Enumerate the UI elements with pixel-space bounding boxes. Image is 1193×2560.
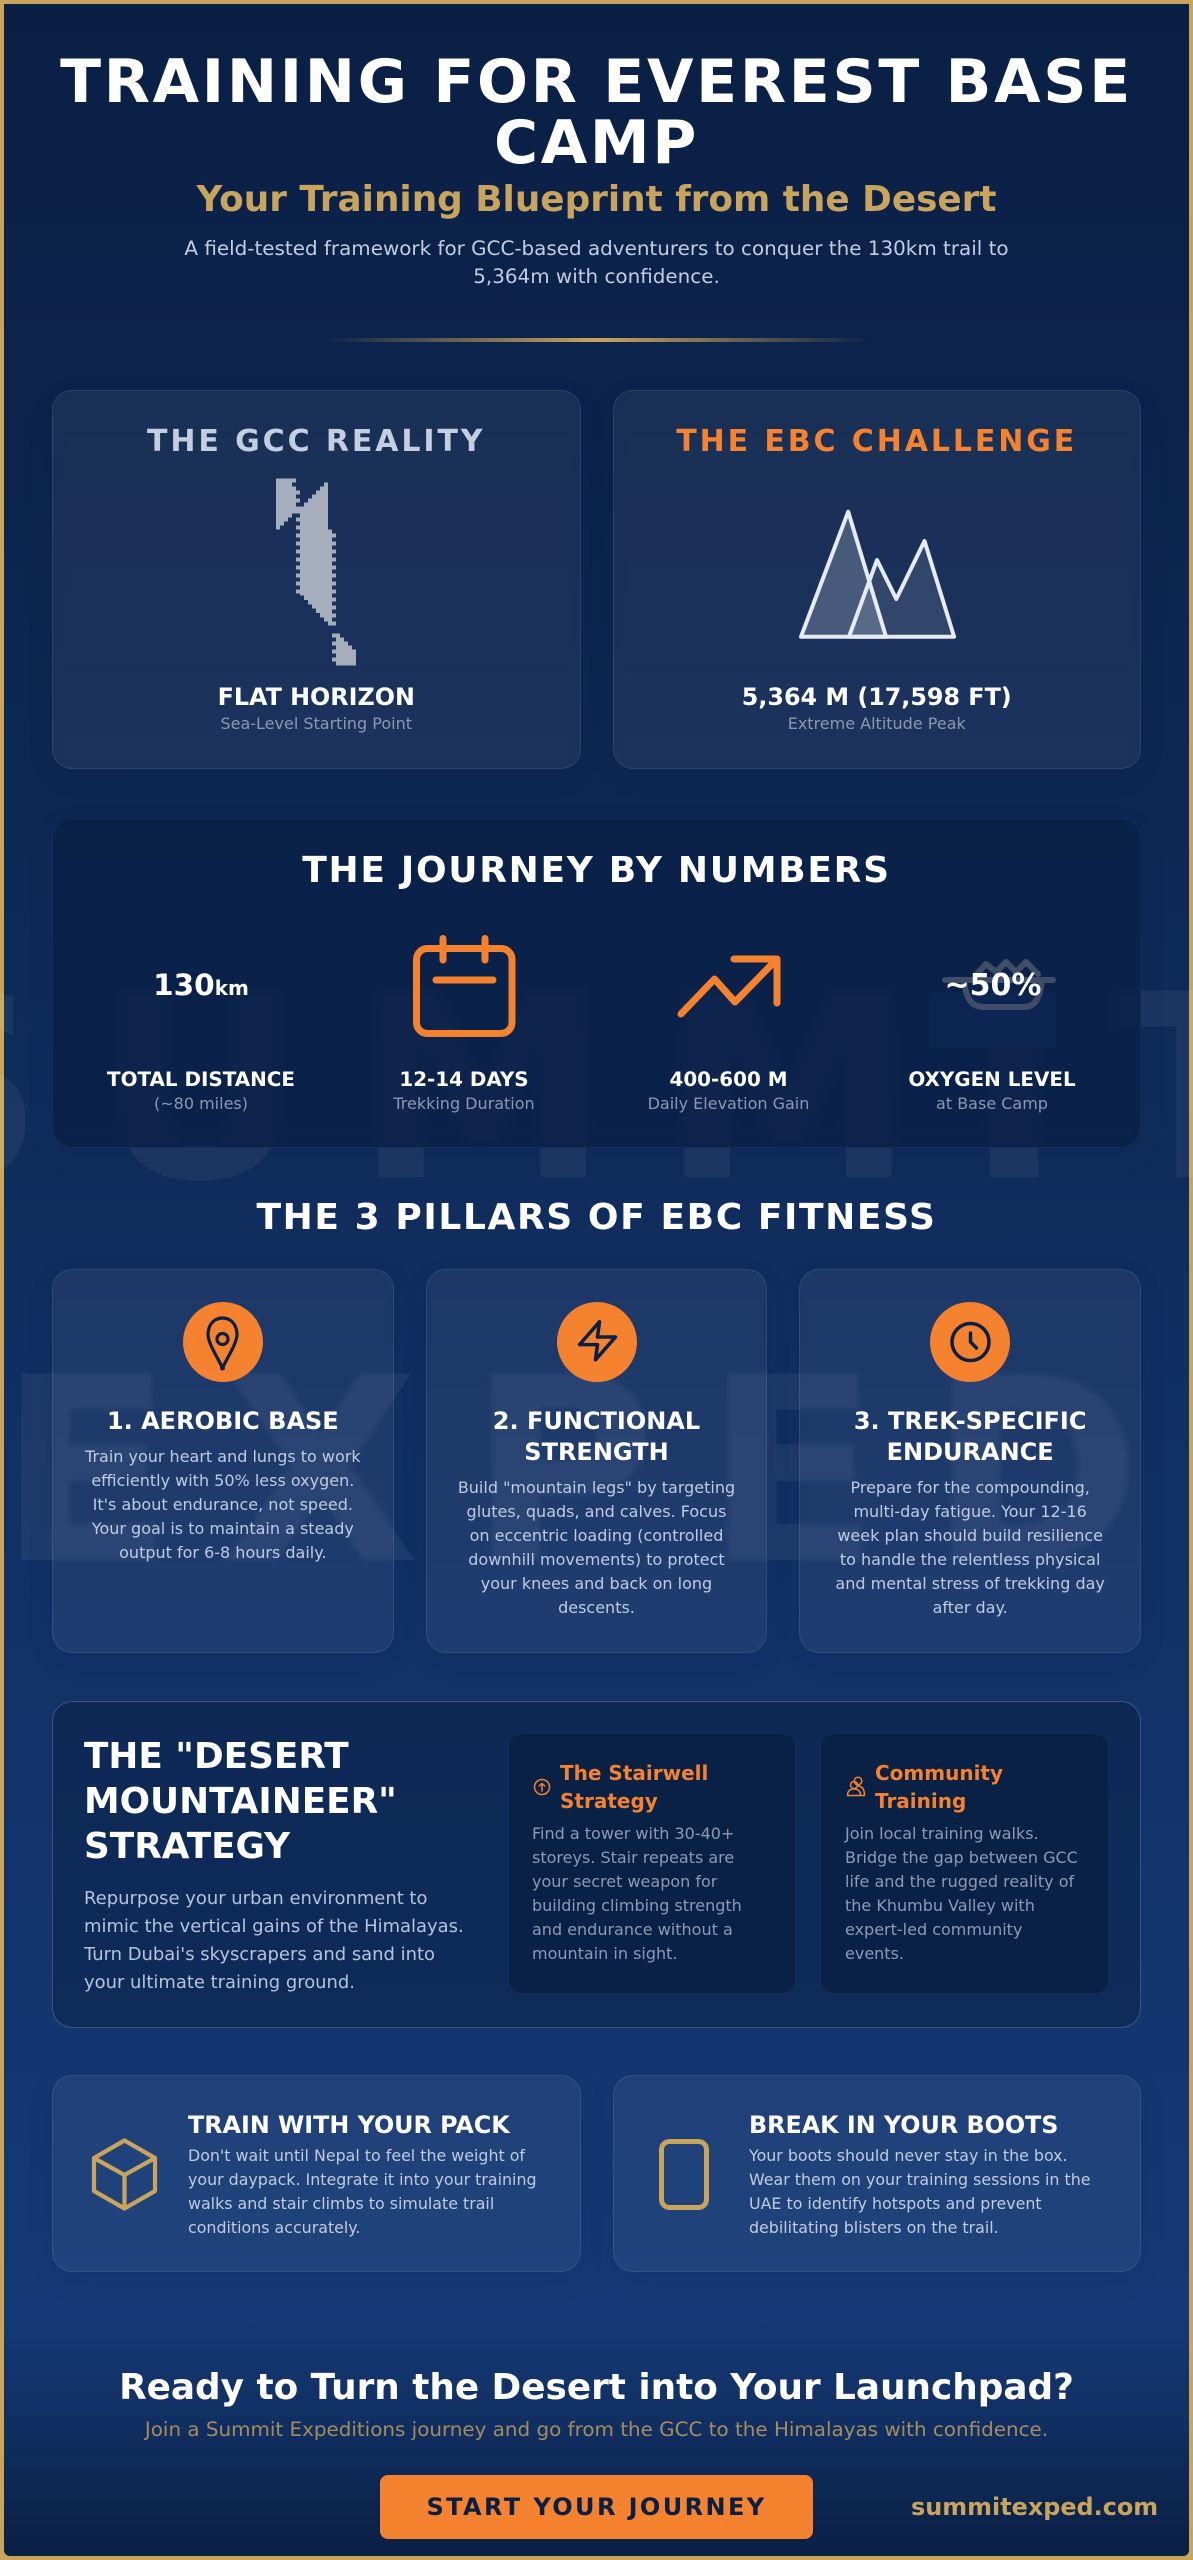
- panel: the GCC reality: [52, 390, 580, 769]
- card: stairwell strategy: [508, 1733, 796, 1994]
- button: [380, 2475, 813, 2539]
- label: TOTAL DISTANCE: [107, 1068, 295, 1091]
- text: after day.: [933, 1598, 1008, 1617]
- text: Find a tower with 30-40+: [532, 1824, 734, 1842]
- heading: THE JOURNEY BY NUMBERS: [302, 850, 891, 891]
- panel: train with your pack: [52, 2075, 580, 2272]
- text: [84, 1888, 464, 1992]
- text: walks and stair climbs to simulate trail: [188, 2194, 494, 2213]
- header: [60, 47, 1133, 342]
- stat: oxygen level: [908, 959, 1076, 1113]
- heading: BREAK IN YOUR BOOTS: [749, 2110, 1058, 2138]
- text: mountain in sight.: [532, 1944, 678, 1962]
- text: Bridge the gap between GCC: [845, 1848, 1078, 1866]
- panel: trek-specific endurance: [799, 1269, 1141, 1653]
- text: and mental stress of trekking day: [835, 1574, 1105, 1593]
- icon: trend up: [678, 956, 780, 1018]
- icon: calendar: [413, 935, 516, 1037]
- text: mimic the vertical gains of the Himalayas.: [84, 1916, 464, 1936]
- heading: STRATEGY: [84, 1826, 290, 1867]
- text: your daypack. Integrate it into your training: [188, 2170, 537, 2189]
- caption: (~80 miles): [154, 1094, 248, 1113]
- icon: box: [92, 2138, 158, 2211]
- icon: people: [846, 1776, 866, 1796]
- text: downhill movements) to protect: [468, 1550, 725, 1569]
- heading: pillars: THE 3 PILLARS OF EBC FITNESS: [256, 1197, 937, 1238]
- label: OXYGEN LEVEL: [908, 1068, 1076, 1091]
- text: to handle the relentless physical: [840, 1550, 1100, 1569]
- card: community training: [820, 1733, 1108, 1994]
- caption: at Base Camp: [936, 1094, 1048, 1113]
- text: Turn Dubai's skyscrapers and sand into: [84, 1944, 435, 1964]
- subtitle: Your Training Blueprint from the Desert: [197, 179, 996, 220]
- text: It's about endurance, not speed.: [93, 1495, 353, 1514]
- text: descents.: [558, 1598, 635, 1617]
- intro text: 5,364m with confidence.: [473, 265, 720, 288]
- panel: break in your boots: [612, 2075, 1141, 2272]
- label: 400-600 M: [669, 1068, 788, 1091]
- icon: location pin: [183, 1302, 263, 1382]
- text: and endurance without a: [532, 1920, 733, 1938]
- text: Your goal is to maintain a steady: [92, 1519, 354, 1538]
- panel: functional strength: [426, 1269, 767, 1653]
- text: Your boots should never stay in the box.: [749, 2146, 1068, 2165]
- text: expert-led community: [845, 1920, 1022, 1938]
- value: 130km: [153, 968, 249, 1002]
- text: Wear them on your training sessions in the: [749, 2170, 1090, 2189]
- divider: [324, 338, 869, 342]
- icon: clock: [930, 1302, 1010, 1382]
- caption: Sea-Level Starting Point: [220, 714, 412, 733]
- heading: 2. FUNCTIONAL: [493, 1406, 700, 1434]
- text: debilitating blisters on the trail.: [749, 2218, 999, 2237]
- title: Strategy: [560, 1789, 658, 1813]
- title: Community: [875, 1761, 1003, 1785]
- text: your knees and back on long: [481, 1574, 712, 1593]
- stat: FLAT HORIZON: [218, 683, 415, 711]
- text: [458, 1478, 735, 1617]
- heading: ENDURANCE: [887, 1438, 1054, 1466]
- text: week plan should build resilience: [837, 1526, 1103, 1545]
- text: [835, 1478, 1105, 1617]
- panel: journey by numbers: [52, 818, 1141, 1148]
- panel: aerobic base: [52, 1269, 394, 1653]
- text: [749, 2146, 1090, 2237]
- text: Train your heart and lungs to work: [85, 1447, 361, 1466]
- title: Training: [875, 1789, 966, 1813]
- text: Join a Summit Expeditions journey and go from the GCC to the Himalayas with confidence.: [145, 2418, 1048, 2441]
- watermark: EXPED: EXPED: [0, 1323, 1190, 1621]
- title: CAMP: [494, 108, 699, 178]
- label: 12-14 DAYS: [399, 1068, 529, 1091]
- text: Build "mountain legs" by targeting: [458, 1478, 735, 1497]
- title: [875, 1761, 1003, 1813]
- heading: [84, 1736, 397, 1867]
- text: life and the rugged reality of: [845, 1872, 1074, 1890]
- heading: 1. AEROBIC BASE: [107, 1406, 339, 1434]
- text: building climbing strength: [532, 1896, 742, 1914]
- heading: TRAIN WITH YOUR PACK: [188, 2110, 510, 2138]
- icon: bolt: [557, 1302, 637, 1382]
- heading: THE "DESERT: [84, 1736, 349, 1777]
- title: The Stairwell: [560, 1761, 708, 1785]
- patch behind value: [929, 993, 1056, 1048]
- value: ~50%: [945, 968, 1041, 1003]
- heading: 3. TREK-SPECIFIC: [854, 1406, 1086, 1434]
- text: glutes, quads, and calves. Focus: [467, 1502, 726, 1521]
- text: Join local training walks.: [845, 1824, 1039, 1842]
- text: on eccentric loading (controlled: [470, 1526, 723, 1545]
- stat: total distance: [107, 968, 295, 1113]
- stat: trekking duration: [393, 935, 535, 1113]
- icon: pixelated flat horizon: [276, 478, 356, 666]
- text: Prepare for the compounding,: [850, 1478, 1090, 1497]
- heading: THE EBC CHALLENGE: [676, 424, 1077, 459]
- panel: the EBC challenge: [612, 390, 1141, 769]
- icon: arrow up circle: [534, 1778, 550, 1796]
- heading: [854, 1406, 1086, 1466]
- icon: oxygen cloud: [942, 959, 1056, 1010]
- text: events.: [845, 1944, 904, 1962]
- text: conditions accurately.: [188, 2218, 360, 2237]
- text: efficiently with 50% less oxygen.: [91, 1471, 354, 1490]
- title: [560, 1761, 708, 1813]
- text: Repurpose your urban environment to: [84, 1888, 427, 1908]
- text: [84, 1447, 361, 1562]
- text: UAE to identify hotspots and prevent: [749, 2194, 1042, 2213]
- intro text: A field-tested framework for GCC-based adventurers to conquer the 130km trail to: [184, 237, 1009, 260]
- text: the Khumbu Valley with: [845, 1896, 1035, 1914]
- caption: Daily Elevation Gain: [648, 1094, 809, 1113]
- text: your ultimate training ground.: [84, 1972, 355, 1992]
- footer gradient: [4, 2320, 1189, 2556]
- text: storeys. Stair repeats are: [532, 1848, 734, 1866]
- intro text: [184, 237, 1009, 288]
- title: TRAINING FOR EVEREST BASE: [60, 47, 1133, 117]
- heading: Ready to Turn the Desert into Your Launchpad?: [119, 2367, 1074, 2408]
- stat: 5,364 M (17,598 FT): [742, 683, 1012, 711]
- heading: THE GCC REALITY: [147, 424, 485, 459]
- title: [60, 47, 1133, 178]
- caption: Trekking Duration: [393, 1094, 535, 1113]
- text: output for 6-8 hours daily.: [119, 1543, 326, 1562]
- footer call to action: [119, 2367, 1158, 2539]
- icon: mountains: [799, 510, 956, 639]
- text: [844, 1824, 1078, 1962]
- icon: boot box: [659, 2139, 709, 2210]
- caption: Extreme Altitude Peak: [788, 714, 966, 733]
- text: Don't wait until Nepal to feel the weight of: [188, 2146, 525, 2165]
- text: [532, 1824, 742, 1962]
- heading: STRENGTH: [524, 1438, 669, 1466]
- text: your secret weapon for: [532, 1872, 717, 1890]
- heading: [493, 1406, 700, 1466]
- text: [188, 2146, 537, 2237]
- heading: MOUNTAINEER": [84, 1781, 397, 1822]
- text: multi-day fatigue. Your 12-16: [853, 1502, 1087, 1521]
- website: summitexped.com: [911, 2493, 1158, 2521]
- stat: daily elevation gain: [648, 956, 809, 1113]
- button: START YOUR JOURNEY: [426, 2493, 767, 2521]
- panel: desert mountaineer strategy: [52, 1701, 1141, 2028]
